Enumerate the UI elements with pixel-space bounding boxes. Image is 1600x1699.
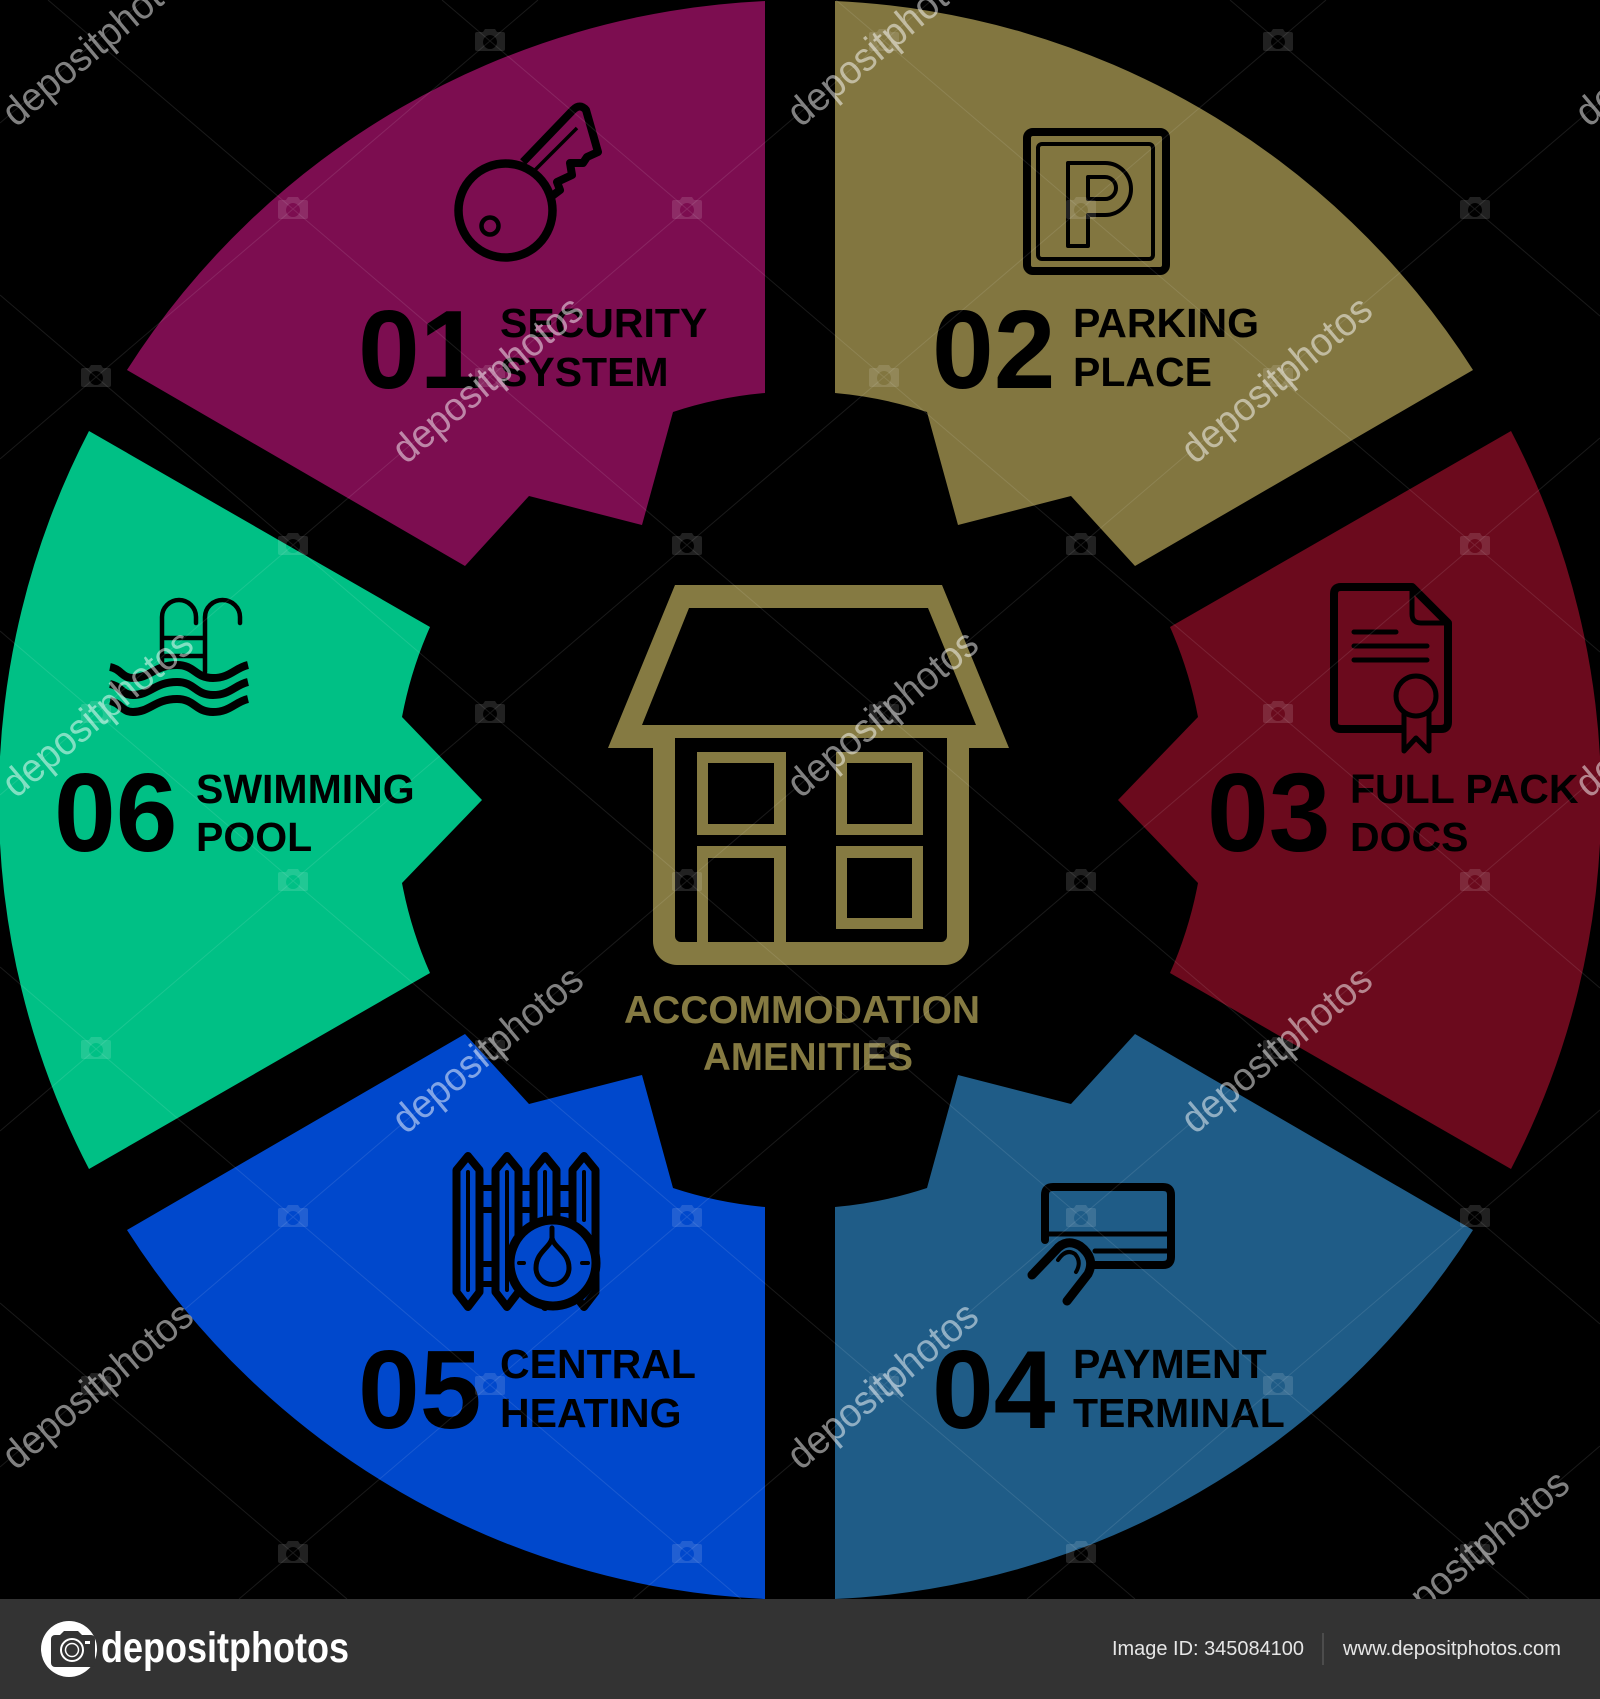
- number 03: 03: [1207, 751, 1330, 875]
- watermark text: depositphotos: [0, 1293, 202, 1478]
- label: security system: SECURITY: [500, 300, 707, 346]
- segment: steel blue: [835, 1034, 1473, 1599]
- label: security system: [500, 300, 707, 395]
- label: parking place: PARKING: [1073, 300, 1259, 346]
- center title: AMENITIES: [703, 1036, 913, 1079]
- panel: 03 full pack docs: [1118, 431, 1600, 1169]
- icon: house body: [653, 738, 969, 965]
- panel: 04 payment terminal: [835, 1034, 1473, 1599]
- banner background: [0, 1599, 1600, 1699]
- label: payment terminal: TERMINAL: [1073, 1390, 1285, 1436]
- icon: key: [458, 106, 598, 258]
- segment: green: [0, 431, 482, 1169]
- label: central heating: CENTRAL: [500, 1341, 696, 1387]
- watermark text: depositphotos: [779, 1293, 987, 1478]
- segment: olive: [835, 1, 1473, 566]
- watermark text: depositphotos: [779, 621, 987, 806]
- image id: Image ID: 345084100: [1112, 1638, 1304, 1660]
- segment: purple: [127, 1, 765, 566]
- label: full pack docs: DOCS: [1350, 814, 1468, 860]
- logo wordmark: depositphotos: [101, 1624, 349, 1672]
- icon: top right window: [836, 752, 923, 835]
- panel: 05 central heating: [127, 1034, 765, 1599]
- watermark text: depositphotos: [1173, 957, 1381, 1142]
- icon: parking sign: [1027, 132, 1166, 271]
- label: payment terminal: PAYMENT: [1073, 1341, 1267, 1387]
- segment: dark red: [1118, 431, 1600, 1169]
- number 01: 01: [358, 288, 481, 412]
- watermark cameras: [81, 29, 1490, 1563]
- segment: blue: [127, 1034, 765, 1599]
- website: www.depositphotos.com: [1342, 1638, 1561, 1660]
- label: parking place: [1073, 300, 1259, 395]
- number 06: 06: [54, 751, 177, 875]
- icon: door: [697, 846, 786, 945]
- number 04: 04: [932, 1328, 1056, 1452]
- label: full pack docs: FULL PACK: [1350, 766, 1579, 812]
- watermark text: depositphotos: [0, 621, 202, 806]
- label: parking place: PLACE: [1073, 349, 1212, 395]
- label: swimming pool: POOL: [196, 814, 312, 860]
- number 05: 05: [358, 1328, 481, 1452]
- watermark text: depositphotos: [1173, 287, 1381, 472]
- icon: radiator with thermostat: [456, 1156, 596, 1307]
- logo: camera badge: [41, 1621, 97, 1677]
- icon: certificate document: [1334, 587, 1448, 751]
- icon: bottom right window: [836, 846, 923, 929]
- center title: [624, 989, 980, 1079]
- panel: 01 security system: [127, 1, 765, 566]
- label: full pack docs: [1350, 766, 1579, 860]
- icon: card in hand: [1032, 1187, 1171, 1301]
- label: central heating: HEATING: [500, 1390, 681, 1436]
- icon: roof: [608, 585, 1009, 748]
- label: central heating: [500, 1341, 696, 1436]
- watermark text: depositphotos: [1370, 1461, 1578, 1646]
- label: security system: SYSTEM: [500, 349, 669, 395]
- panel: 06 swimming pool: [0, 431, 482, 1169]
- number 02: 02: [932, 288, 1055, 412]
- icon: top left window: [697, 752, 786, 835]
- panel: 02 parking place: [835, 1, 1473, 566]
- center title: ACCOMMODATION: [624, 989, 980, 1032]
- watermark text: depositphotos: [384, 287, 592, 472]
- footer banner: [0, 1599, 1600, 1699]
- label: swimming pool: [196, 766, 415, 860]
- label: payment terminal: [1073, 1341, 1285, 1436]
- icon: pool with ladder: [110, 600, 248, 712]
- center: house icon: [608, 585, 1009, 965]
- label: swimming pool: SWIMMING: [196, 766, 415, 812]
- watermark text: depositphotos: [384, 957, 592, 1142]
